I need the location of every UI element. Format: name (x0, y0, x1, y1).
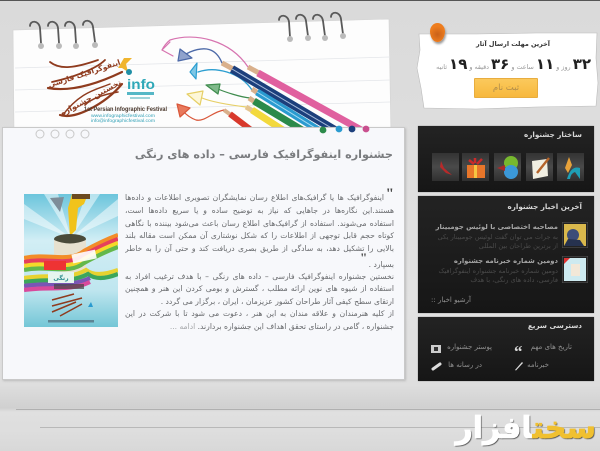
paint can (50, 194, 90, 274)
icon: colour circles (494, 153, 521, 181)
binder pins (320, 126, 370, 134)
header notebook illustration (14, 12, 391, 127)
icon: info figure (557, 153, 584, 181)
article body text: هستند.این نگاره‌ها در جاهایی که نیاز به توضیح ساده و یا سریع داده‌ها است، (125, 206, 394, 215)
countdown timer: ۳۲ روز و ۱۱ ساعت و ۳۶ دقیقه و ۱۹ ثانیه (436, 55, 591, 73)
panel heading: آخرین اخبار جشنواره (508, 202, 582, 211)
register button (474, 78, 538, 98)
link: important dates: تاریخ های مهم (531, 343, 572, 351)
sidebar: latest news (418, 196, 594, 313)
coloured pencils (220, 60, 363, 127)
link: festival poster: پوستر جشنواره (447, 343, 492, 351)
closing quote: " (360, 250, 367, 265)
thumbnail (562, 222, 588, 248)
news archive link: آرشیو اخبار :: (431, 296, 471, 304)
notebook paper (13, 19, 391, 135)
article body text: نخستین جشنواره اینفوگرافیک فارسی – داده های رنگی – با هدف ترغیب افراد به (125, 272, 394, 281)
festival calligraphy logo (47, 58, 167, 123)
torn paper (416, 32, 598, 110)
register button: ثبت نام (493, 83, 519, 93)
news item 1: به جرات می توان گفت لوئیس جومبینار یکی (438, 233, 558, 241)
festival calligraphy logo: info@infographicfestival.com (91, 118, 155, 123)
icon: pen (515, 362, 523, 370)
festival calligraphy logo: نخستین جشنواره (59, 78, 123, 118)
article body text: کوتاه حجم قابل توجهی از اطلاعات را که شکل نوشتاری آن ممکن است مقاله بلند (125, 231, 394, 240)
article body text: بسپارد . (369, 260, 394, 269)
spiral rings left (30, 21, 98, 49)
opening quote: " (386, 186, 394, 202)
binder holes (36, 130, 90, 138)
sidebar: festival structure (418, 126, 594, 192)
poster labels: رنگی (53, 274, 69, 282)
watermark logo: سختافزار (456, 411, 596, 446)
poster rays (24, 194, 118, 238)
article title: جشنواره اینفوگرافیک فارسی – داده های رنگی (135, 148, 393, 161)
article body text: بالایی را تشکیل دهد، به سادگی از طریق بصری دریافت کند و حتی آن را به خاطر (125, 244, 394, 253)
sidebar: quick access (418, 317, 594, 381)
thumbnail (562, 256, 588, 283)
icon: quote marks: “ (514, 342, 522, 361)
countdown heading: آخرین مهلت ارسال آثار (476, 40, 550, 48)
icon: gift box (462, 153, 489, 181)
article body text: اینفوگرافیک ها یا گرافیک‌های اطلاع رسان نمایشگران تصویری اطلاعات و داده‌ها (125, 193, 384, 202)
icon: red figure (432, 153, 459, 181)
article body text: ارتقای سطح کیفی آثار طراحان کشور عزیزمان ، ایران ، برگزار می گردد . (161, 297, 394, 306)
orange pin (430, 23, 445, 42)
news item 2 (438, 256, 588, 284)
poster rainbow (24, 235, 118, 290)
poster thumbnail (24, 194, 118, 327)
poster calligraphy (48, 294, 94, 322)
pencil arrows (162, 37, 252, 120)
info logo: info (127, 76, 155, 92)
spiral rings right (279, 13, 346, 42)
festival calligraphy logo: www.infographicfestival.com (91, 113, 155, 118)
panel heading: دسترسی سریع (528, 321, 582, 330)
article body text: جشنواره ، گامی در راستای تحقق اهداف این جشنواره بردارند. ادامه ... (170, 322, 394, 331)
article body text: استفاده از شیوه های نوین ارائه مطلب ، گسترش و بومی کردن این هنر و همچنین (125, 284, 394, 293)
news item 1: از برترین طراحان بین المللی (479, 242, 558, 250)
panel heading: ساختار جشنواره (524, 130, 582, 139)
main article panel (2, 127, 405, 380)
article body text (125, 186, 394, 331)
article body text: از کلیه هنرمندان و علاقه مندان به این هنر ، دعوت می شود تا با شرکت در این (125, 309, 394, 318)
link: in the media: در رسانه ها (448, 361, 482, 369)
news item 2: فارسی، داده های رنگی، با هدف (470, 276, 558, 284)
news item 1 (435, 222, 588, 250)
news item 1: مصاحبه اختصاصی با لوئیس جومبینار (436, 223, 558, 231)
countdown card (416, 23, 598, 110)
festival calligraphy logo: اینفوگرافیک فارسی (47, 58, 121, 90)
icon: poster (431, 345, 441, 353)
icon: link (431, 362, 442, 371)
icon: pencil and note (526, 153, 553, 181)
festival caption: 1st Persian Infographic Festival (84, 107, 167, 113)
news item 2: دومین شماره خبرنامه جشنواره (454, 257, 558, 265)
article body text: استفاده می‌شوند. استفاده از گرافیک‌های اطلاع رسان باعث می‌شود بیننده با نگاهی (125, 219, 394, 228)
link: newsletter: خبرنامه (527, 361, 549, 369)
news item 2: دومین شماره خبرنامه جشنواره اینفوگرافیک (438, 267, 558, 275)
